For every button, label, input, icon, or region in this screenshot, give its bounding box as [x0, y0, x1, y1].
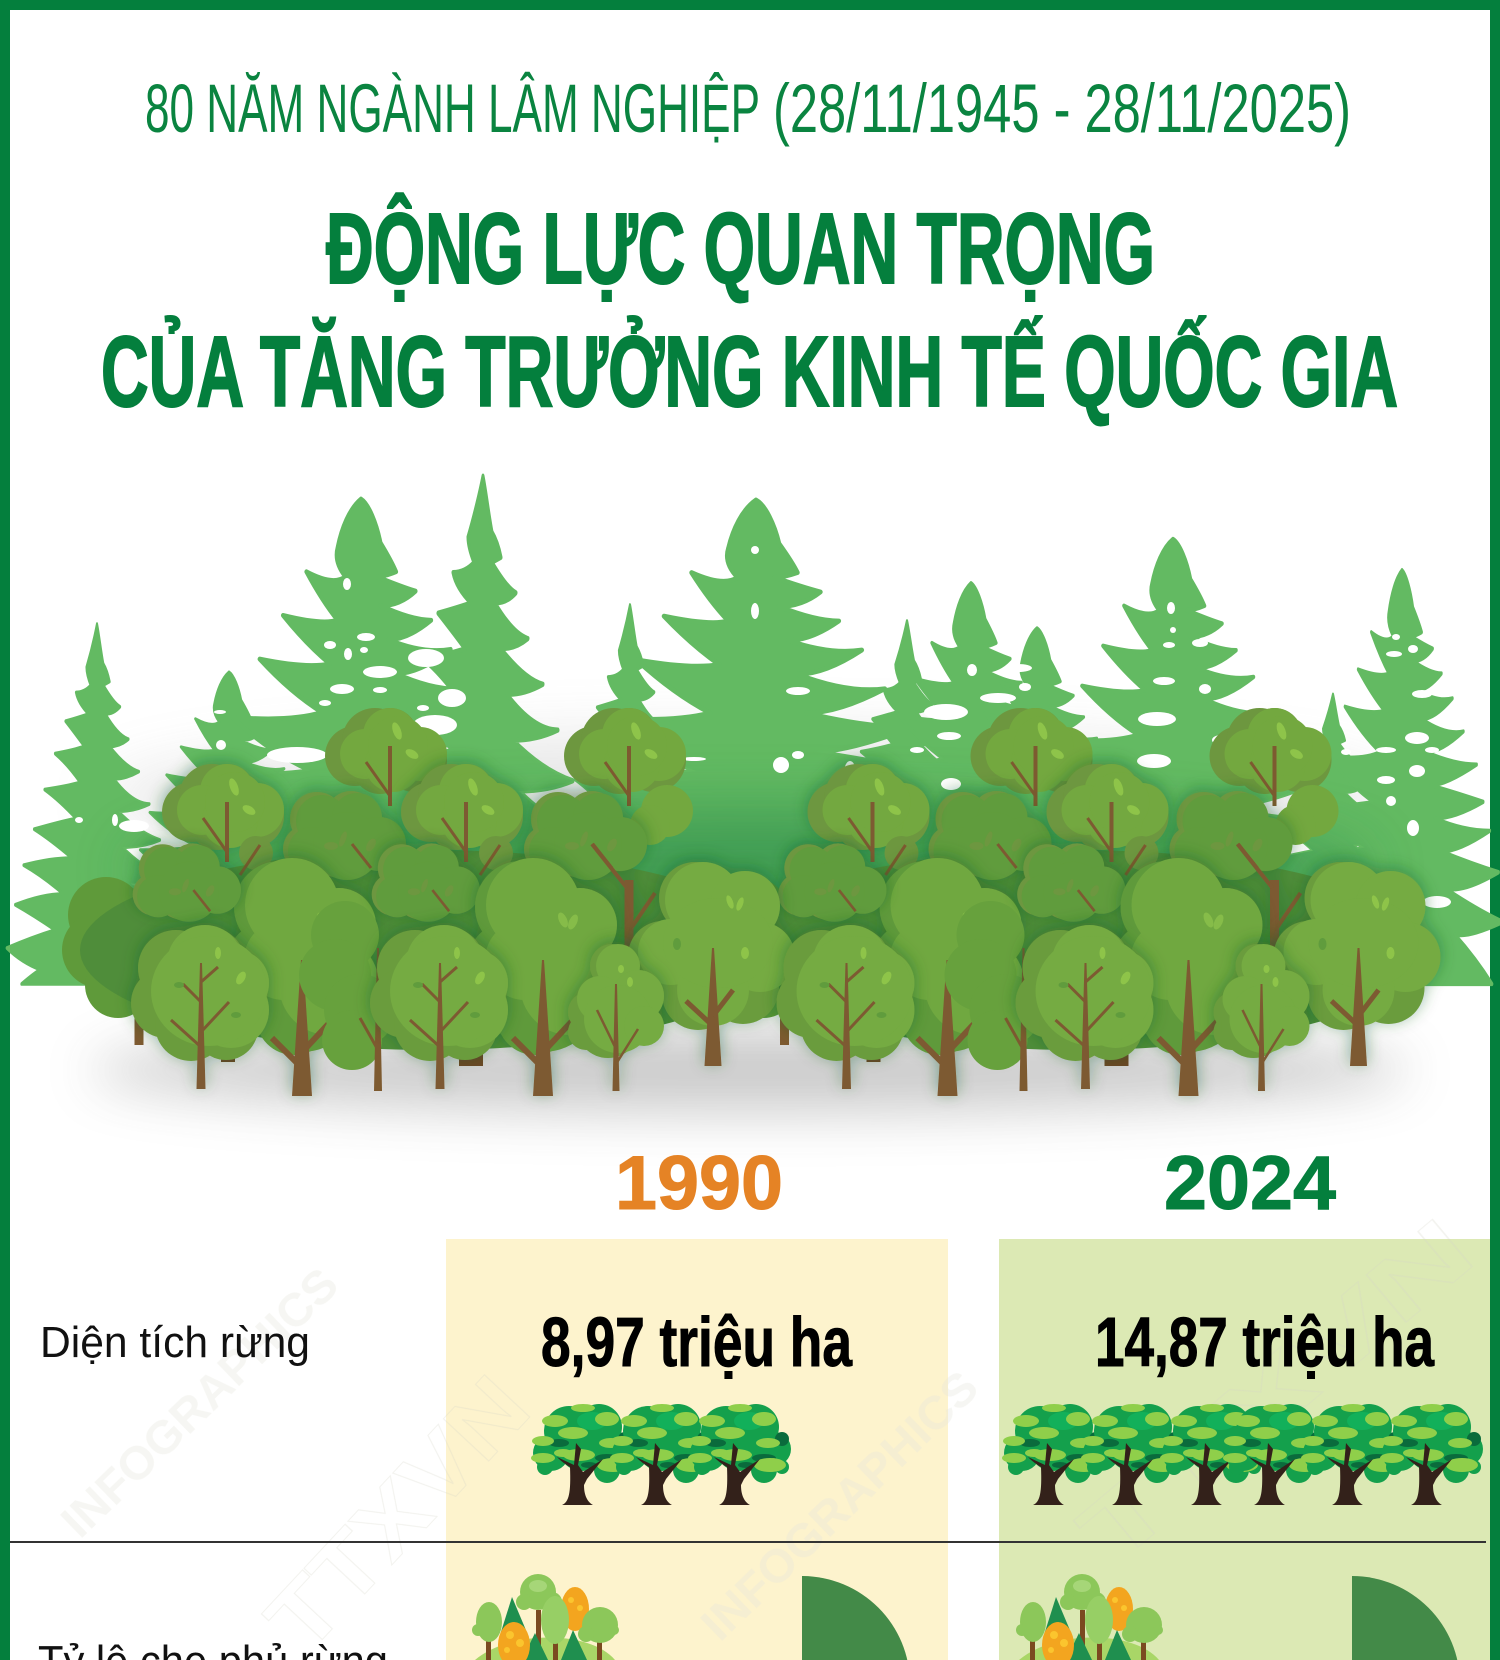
icon: 6 trees for 2024 — [1002, 1404, 1483, 1505]
supertitle: 80 NĂM NGÀNH LÂM NGHIỆP — [145, 70, 760, 147]
main title — [101, 193, 1398, 428]
icon: forest 2024 — [1016, 1574, 1163, 1660]
watermarks: INFOGRAPHICS — [51, 1258, 348, 1547]
deciduous tree clusters — [62, 708, 1440, 1096]
pie chart 1990 — [802, 1576, 910, 1660]
row label: forest area: Diện tích rừng — [40, 1318, 310, 1367]
icon: forest 1990 — [472, 1574, 619, 1660]
value 1990: forest area: 8,97 triệu ha — [541, 1303, 853, 1381]
row divider — [10, 1541, 1486, 1543]
year 2024: 2024 — [1164, 1141, 1336, 1226]
watermarks — [51, 1199, 1493, 1660]
watermarks: INFOGRAPHICS — [691, 1361, 988, 1650]
pie chart 2024 — [1352, 1576, 1460, 1660]
year 1990: 1990 — [615, 1141, 783, 1226]
icon: 3 trees for 1990 — [531, 1404, 791, 1505]
panel: 2024 column — [999, 1239, 1490, 1660]
watermarks: TTXVN — [1061, 1199, 1493, 1584]
forest illustration — [7, 476, 1500, 1112]
conifer backdrop — [7, 476, 1500, 984]
panel: 1990 column — [446, 1239, 948, 1660]
